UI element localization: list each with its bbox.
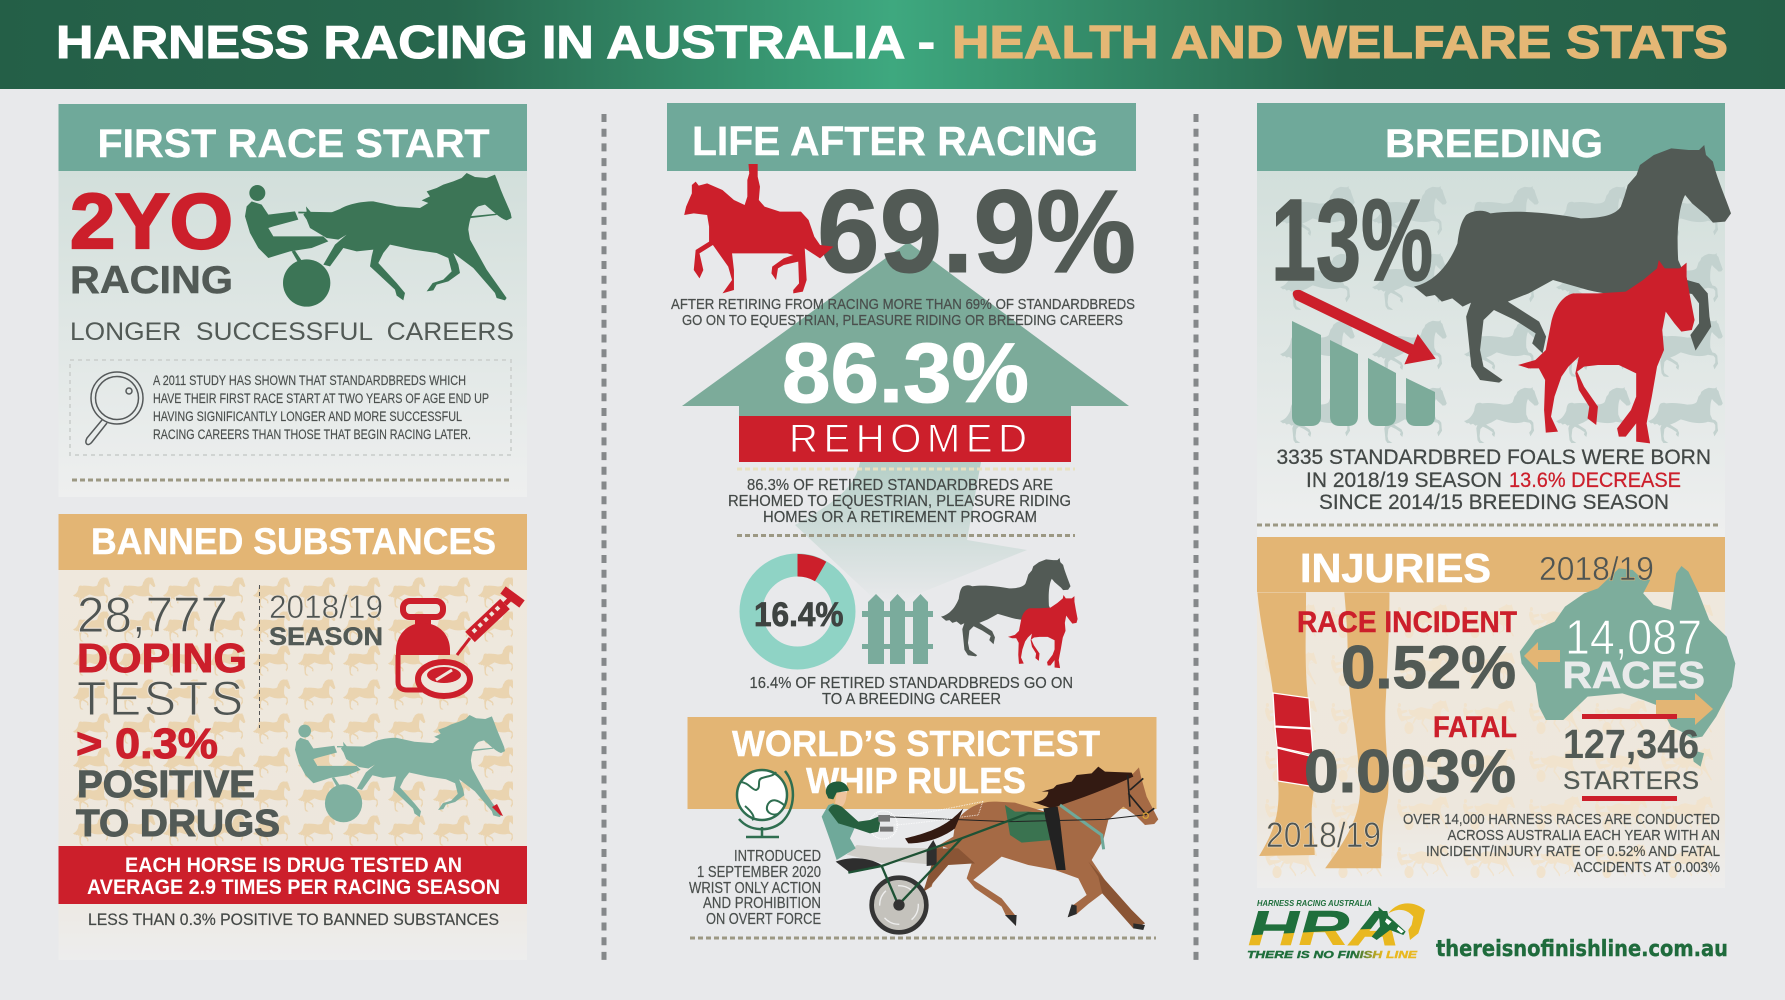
text: after retiring — [671, 296, 1135, 329]
text: rehomed detail: HOMES OR A RETIREMENT PROGRAM — [763, 509, 1037, 526]
panel: breeding — [1257, 103, 1731, 537]
heading block: whip rules: WHIP RULES — [806, 760, 1026, 801]
text: foal statistics: 13.6% DECREASE — [1509, 469, 1681, 492]
text: after retiring: GO ON TO EQUESTRIAN, PLEASURE RIDING OR BREEDING CAREERS — [682, 312, 1123, 329]
heading block: whip rules: WORLD’S STRICTEST — [732, 723, 1100, 764]
up arrow: rehomed — [682, 242, 1129, 416]
label: season: SEASON — [269, 623, 383, 651]
arrow: decrease — [1294, 291, 1434, 363]
label: rehomed — [739, 416, 1071, 462]
text: injury detail: ACROSS AUSTRALIA EACH YEAR WITH AN — [1448, 827, 1720, 844]
icon: teal sulky horse — [295, 715, 505, 822]
down arrow: fading background shape — [795, 462, 1027, 602]
illustration: driver, sulky and horse — [822, 767, 1158, 932]
logo: Harness Racing Australia: HRA — [1248, 902, 1400, 956]
label: racing: RACING — [70, 259, 233, 302]
stat: race incident: 0.52% — [1341, 634, 1516, 701]
text: breeding career: TO A BREEDING CAREER — [822, 691, 1001, 708]
donut chart: 16.4% — [751, 554, 844, 658]
illustration: horse legs — [1257, 592, 1389, 868]
label: tests: TESTS — [77, 673, 243, 726]
stat: races — [1562, 611, 1705, 697]
stat: starters — [1563, 714, 1699, 801]
tagline: LONGER SUCCESSFUL CAREERS — [70, 318, 514, 346]
text: after retiring: AFTER RETIRING FROM RACING MORE THAN 69% OF STANDARDBREDS — [671, 296, 1135, 313]
logo: Harness Racing Australia: THERE IS NO FINISH LINE — [1247, 950, 1417, 961]
label: positive: POSITIVE — [77, 764, 255, 806]
callout: drug testing frequency: EACH HORSE IS DRUG TESTED AN — [125, 853, 462, 877]
stat: fatal: 0.003% — [1304, 738, 1516, 805]
stat: 69.9%: 69.9% — [817, 166, 1136, 298]
icon: magnifying glass — [86, 372, 143, 445]
text: rehomed detail: REHOMED TO EQUESTRIAN, PLEASURE RIDING — [728, 493, 1071, 510]
text: injury detail: ACCIDENTS AT 0.003% — [1574, 859, 1720, 876]
label: season: 2018/19 — [269, 589, 383, 625]
note: less than 0.3%: LESS THAN 0.3% POSITIVE TO BANNED SUBSTANCES — [88, 910, 499, 929]
text: whip rule details — [689, 848, 821, 928]
text: injury detail: INCIDENT/INJURY RATE OF 0.52% AND FATAL — [1426, 843, 1720, 860]
stat: races: RACES — [1562, 655, 1705, 697]
stat: race incident: RACE INCIDENT — [1297, 606, 1517, 639]
text: rehomed detail: 86.3% OF RETIRED STANDARDBREDS ARE — [747, 477, 1053, 494]
text: breeding career — [750, 675, 1073, 708]
donut chart: 16.4%: 16.4% — [754, 596, 844, 634]
icon: mare and foal — [941, 558, 1078, 668]
study text: HAVE THEIR FIRST RACE START AT TWO YEARS OF AGE END UP — [153, 391, 489, 406]
label: doping: DOPING — [77, 635, 247, 681]
stat: races: 14,087 — [1565, 611, 1702, 665]
panel: first race start — [58, 104, 527, 497]
icon: red dressage rider — [684, 164, 833, 293]
text: injury detail — [1403, 811, 1720, 876]
heading bar: life after racing — [667, 103, 1136, 171]
arrows on map — [1524, 642, 1713, 725]
text: whip rule details: INTRODUCED — [734, 848, 821, 865]
stat: positive rate: > 0.3% — [76, 720, 218, 768]
icon: globe — [737, 770, 793, 837]
stat: race incident — [1297, 606, 1517, 701]
heading: breeding: BREEDING — [1385, 122, 1603, 166]
title banner: HARNESS RACING IN AUSTRALIA - — [56, 16, 935, 68]
stat: fatal: FATAL — [1433, 711, 1517, 744]
bar chart: falling foal numbers — [1292, 321, 1435, 426]
text: foal statistics: IN 2018/19 SEASON — [1306, 469, 1502, 492]
icon: large grey horse — [1414, 145, 1731, 383]
stat: 13%: 13% — [1271, 175, 1433, 305]
logo: Harness Racing Australia: HARNESS RACING AUSTRALIA — [1257, 898, 1372, 908]
heading: banned substances: BANNED SUBSTANCES — [91, 521, 496, 562]
stat: 28,777: 28,777 — [77, 587, 228, 643]
heading: injuries: INJURIES — [1300, 545, 1491, 591]
study text — [153, 373, 489, 442]
heading: first race start: FIRST RACE START — [98, 122, 490, 166]
study text: A 2011 STUDY HAS SHOWN THAT STANDARDBREDS WHICH — [153, 373, 466, 388]
heading: life after racing: LIFE AFTER RACING — [692, 118, 1098, 164]
callout: drug testing frequency — [58, 846, 527, 904]
icon: red foal — [1518, 260, 1695, 443]
heading block: whip rules — [688, 717, 1156, 809]
map: Australia — [1520, 566, 1735, 767]
label: top season: 2018/19 — [1539, 550, 1654, 587]
stat: starters: STARTERS — [1563, 767, 1699, 795]
text: breeding career: 16.4% OF RETIRED STANDARDBREDS GO ON — [750, 675, 1073, 692]
stat: 2YO: 2YO — [70, 177, 233, 265]
callout: drug testing frequency: AVERAGE 2.9 TIMES PER RACING SEASON — [87, 875, 500, 899]
stat: 86.3%: 86.3% — [782, 326, 1029, 420]
text: whip rule details: WRIST ONLY ACTION — [689, 880, 821, 897]
icon: medicine bottle and pill — [396, 601, 470, 696]
text: injury detail: OVER 14,000 HARNESS RACES ARE CONDUCTED — [1403, 811, 1720, 828]
title banner: HEALTH AND WELFARE STATS — [952, 16, 1728, 68]
illustration: red bandage — [1273, 693, 1316, 787]
stat: starters: 127,346 — [1563, 721, 1699, 767]
icon: sulky horse — [245, 173, 512, 307]
text: whip rule details: AND PROHIBITION — [703, 895, 821, 912]
text: whip rule details: ON OVERT FORCE — [706, 911, 821, 928]
text: whip rule details: 1 SEPTEMBER 2020 — [697, 864, 821, 881]
website url: thereisnofinishline.com.au — [1436, 937, 1728, 962]
panel: banned substances — [58, 514, 527, 960]
label: bottom season: 2018/19 — [1266, 816, 1381, 855]
study text: HAVING SIGNIFICANTLY LONGER AND MORE SUCCESSFUL — [153, 409, 462, 424]
logo: Harness Racing Australia — [1247, 898, 1425, 961]
panel: life after racing — [667, 103, 1158, 938]
title banner — [0, 0, 1785, 89]
label: season — [269, 589, 383, 651]
study note box — [70, 360, 511, 455]
text: foal statistics: 3335 STANDARDBRED FOALS WERE BORN — [1276, 446, 1711, 469]
icon: fence — [862, 594, 933, 664]
label: to drugs: TO DRUGS — [76, 803, 280, 845]
icon: syringe — [457, 590, 522, 655]
text: rehomed detail — [728, 477, 1071, 526]
label: rehomed: REHOMED — [789, 417, 1027, 461]
text: foal statistics: SINCE 2014/15 BREEDING SEASON — [1319, 491, 1669, 514]
stat: fatal — [1304, 711, 1517, 805]
study text: RACING CAREERS THAN THOSE THAT BEGIN RACING LATER. — [153, 427, 471, 442]
panel: injuries — [1257, 537, 1735, 888]
text: foal statistics — [1276, 446, 1711, 514]
